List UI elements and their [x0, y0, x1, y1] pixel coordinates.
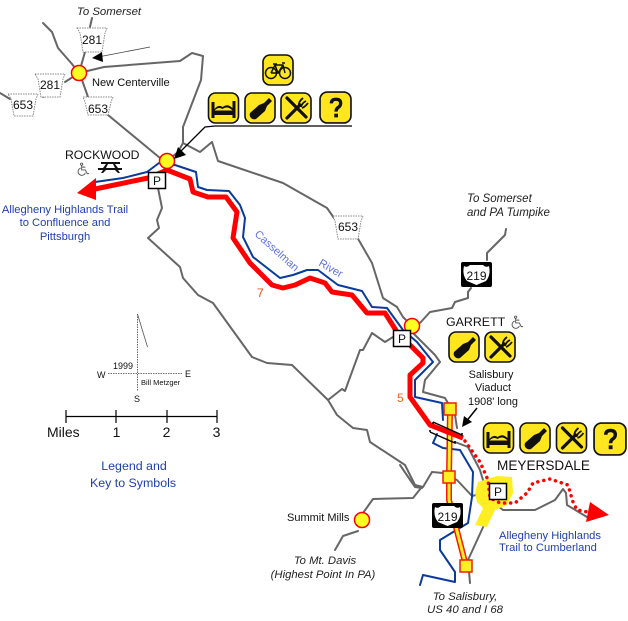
label: To Mt. Davis: To Mt. Davis: [294, 555, 357, 567]
parking: Meyersdale: P: [494, 485, 502, 499]
town marker: Rockwood: [160, 154, 174, 168]
town marker: Garrett: [404, 318, 420, 334]
label: To Somerset and PA Turnpike: [467, 193, 550, 219]
highlight: Meyersdale area: [475, 476, 513, 527]
label: trail to Cumberland: Allegheny Highlands: [499, 530, 601, 542]
compass: 1999: [113, 361, 133, 371]
scale bar: [47, 410, 221, 440]
label: New Centerville: New Centerville: [92, 77, 170, 89]
route sign: PA 653 east: 653: [338, 220, 358, 234]
scale bar: 3: [213, 424, 221, 440]
route sign: PA 281 west: [35, 74, 65, 97]
route sign: PA 281 north: [77, 28, 107, 52]
label: To Salisbury: [427, 591, 504, 616]
route sign: US 219 south: 219: [437, 510, 458, 524]
compass: Bill Metzger: [141, 378, 181, 387]
route sign: PA 653 west: 653: [13, 98, 33, 112]
label: trail to Pittsburgh: Allegheny Highlands Trail: [2, 204, 128, 216]
icons: Rockwood services: [208, 55, 351, 123]
town marker: Summit Mills: [354, 512, 370, 528]
Salisbury Viaduct: [430, 422, 462, 443]
arrow: Salisbury Viaduct: [462, 408, 477, 427]
parking: Rockwood: P: [153, 174, 161, 188]
label: mile 5: 5: [397, 391, 404, 405]
compass: E: [185, 369, 191, 379]
trail: solid red route with west arrow: [77, 170, 463, 438]
US 219 route: [443, 403, 472, 572]
label: To Salisbury: To Salisbury,: [433, 591, 497, 603]
route sign: US 219 north: 219: [466, 269, 487, 283]
route sign: PA 653 east: [333, 216, 363, 239]
label: To Somerset and PA Turnpike: and PA Tumpike: [467, 207, 550, 219]
label: mile 7: 7: [257, 286, 264, 300]
scale bar: Miles: [47, 424, 80, 440]
label: River: River: [316, 257, 345, 281]
parking: Garrett: [394, 330, 410, 346]
label: To Somerset: To Somerset: [77, 6, 142, 18]
route sign: PA 653 south: 653: [88, 102, 108, 116]
icons: Meyersdale services: [484, 423, 626, 455]
label: To Salisbury: US 40 and I 68: [427, 604, 504, 616]
label: To Mt. Davis: [271, 555, 376, 581]
route sign: US 219 north: [461, 262, 492, 287]
label: Garrett: GARRETT: [446, 315, 506, 329]
label: trail to Pittsburgh: [2, 204, 128, 243]
label: Salisbury Viaduct: Salisbury: [469, 369, 514, 381]
parking: Meyersdale: [490, 484, 506, 500]
label: trail to Cumberland: [499, 530, 601, 554]
parking: Rockwood: [148, 172, 166, 188]
route sign: US 219 south: [432, 503, 463, 528]
town marker: New Centerville: [72, 66, 86, 80]
icon: wheelchair Rockwood: [78, 163, 89, 175]
legend link: Key to Symbols: [90, 476, 176, 490]
label: Salisbury Viaduct: [468, 369, 518, 408]
arrow: to 281 junction: [92, 47, 150, 62]
label: Salisbury Viaduct: Viaduct: [475, 382, 511, 394]
scale bar: 2: [163, 424, 171, 440]
label: To Mt. Davis: (Highest Point In PA): [271, 569, 376, 581]
label: trail to Pittsburgh: Pittsburgh: [40, 231, 90, 243]
legend link: Legend and: [101, 459, 167, 473]
label: To Somerset and PA Turnpike: To Somerset: [467, 193, 533, 205]
label: trail to Pittsburgh: to Confluence and: [20, 217, 110, 229]
compass: S: [134, 394, 140, 404]
label: Rockwood: ROCKWOOD: [65, 148, 140, 162]
route sign: PA 281 north: 281: [82, 33, 102, 47]
label: trail to Cumberland: Trail to Cumberland: [499, 542, 597, 554]
compass: [97, 314, 191, 404]
icons: Garrett services: [449, 332, 515, 362]
label: Meyersdale: MEYERSDALE: [497, 458, 590, 473]
legend link: [90, 459, 176, 490]
trail: dotted section to Cumberland: [465, 441, 609, 522]
label: Salisbury Viaduct: 1908' long: [468, 396, 518, 408]
label: Summit Mills: Summit Mills: [287, 512, 350, 524]
icon: wheelchair Garrett: [512, 316, 523, 328]
arrow: Rockwood services: [174, 126, 352, 159]
label: Casselman: Casselman: [252, 228, 301, 274]
Casselman River: [95, 163, 473, 585]
parking: Garrett: P: [398, 332, 406, 346]
scale bar: 1: [113, 424, 121, 440]
route sign: PA 281 west: 281: [40, 78, 60, 92]
route sign: PA 653 west: [8, 94, 38, 116]
icon: picnic table: [98, 162, 122, 173]
route sign: PA 653 south: [83, 97, 113, 116]
compass: W: [97, 370, 106, 380]
